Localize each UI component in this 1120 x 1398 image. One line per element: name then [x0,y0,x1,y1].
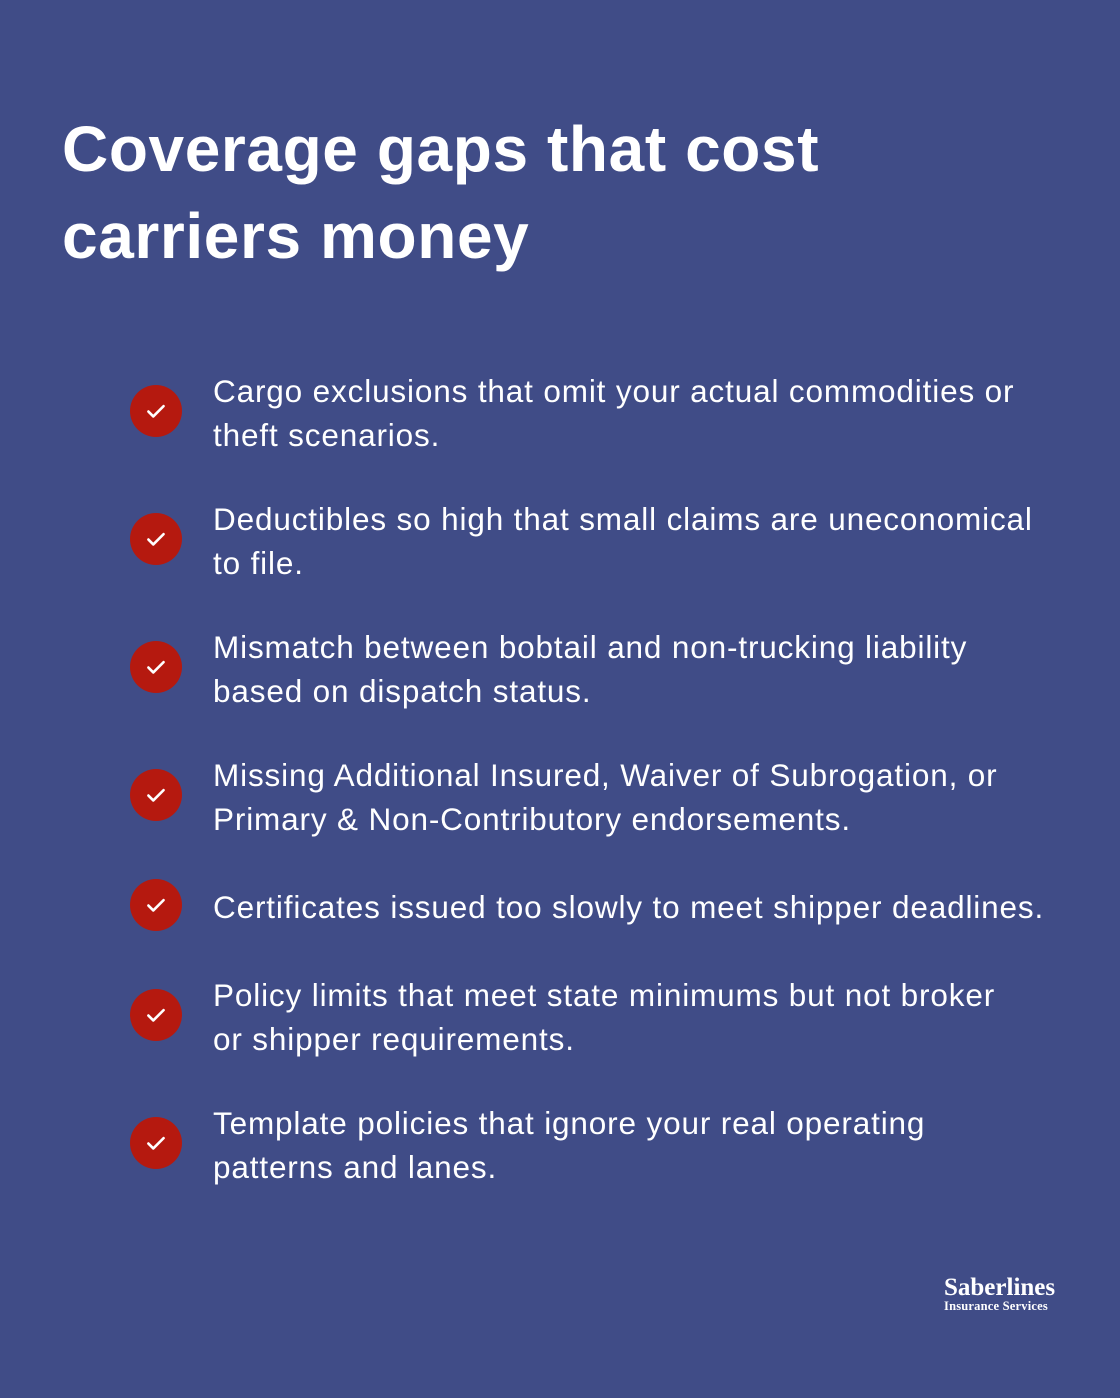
item 7: patterns and lanes. [213,1149,497,1185]
item 2 [130,501,1033,581]
item 2: to file. [213,545,304,581]
item 3: Mismatch between bobtail and non-trucking liability [213,629,967,665]
item 4 [130,757,998,837]
item 1: theft scenarios. [213,417,440,453]
item 7: Template policies that ignore your real operating [213,1105,925,1141]
title [62,113,819,272]
item 1: Cargo exclusions that omit your actual commodities or [213,373,1014,409]
item 6: or shipper requirements. [213,1021,575,1057]
item 2: Deductibles so high that small claims are uneconomical [213,501,1033,537]
item 5: Certificates issued too slowly to meet shipper deadlines. [213,889,1044,925]
item 3: based on dispatch status. [213,673,592,709]
item 5 [130,879,1044,931]
title: Coverage gaps that cost [62,113,819,185]
title: carriers money [62,200,529,272]
item 4: Missing Additional Insured, Waiver of Subrogation, or [213,757,998,793]
logo: Insurance Services [944,1299,1048,1313]
logo: Saberlines [944,1274,1055,1301]
item 4: Primary & Non-Contributory endorsements. [213,801,851,837]
item 7 [130,1105,925,1185]
item 3 [130,629,967,709]
item 1 [130,373,1014,453]
logo [944,1274,1055,1313]
item 6: Policy limits that meet state minimums but not broker [213,977,995,1013]
item 6 [130,977,995,1057]
